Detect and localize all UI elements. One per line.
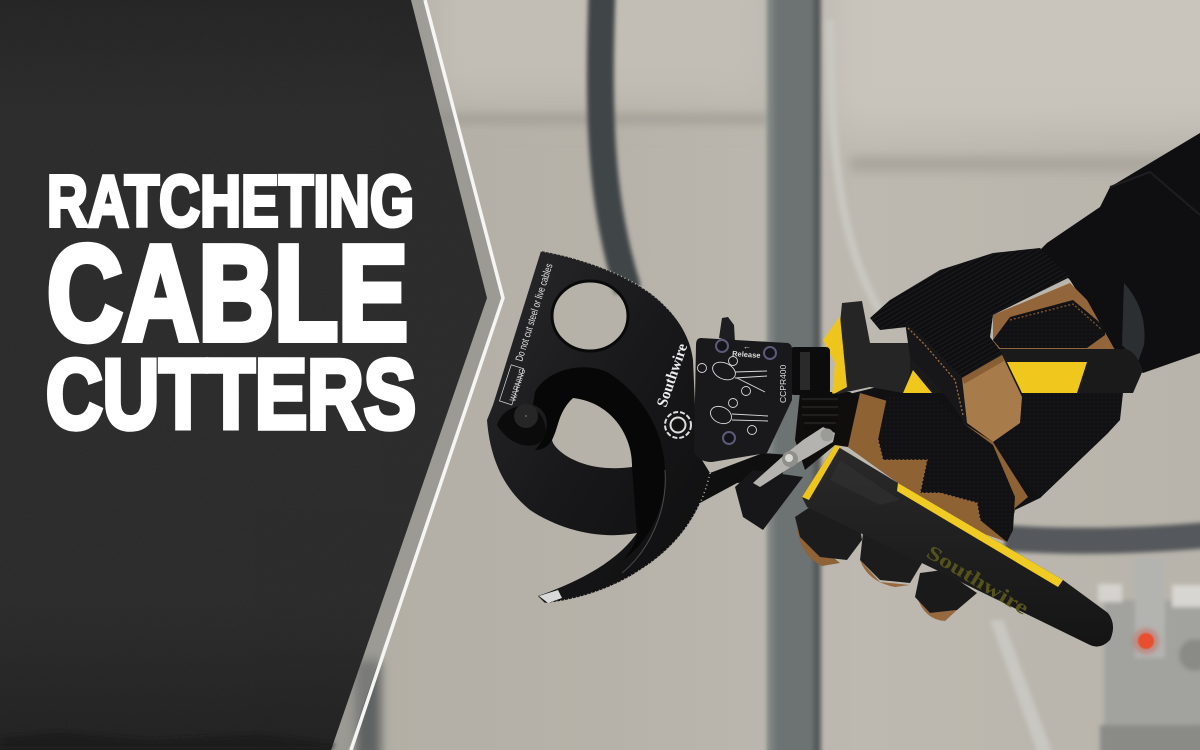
blade tip highlight xyxy=(539,590,562,603)
brown palm xyxy=(848,393,1028,542)
shadow behind spring xyxy=(795,392,862,470)
plate label text: CCPR400 xyxy=(778,364,788,403)
warning label xyxy=(499,365,527,405)
bolt lobe xyxy=(497,406,546,446)
plate label text: ← xyxy=(743,342,751,351)
palm heel xyxy=(993,393,1123,498)
photo: ratcheting cable cutter tool xyxy=(487,133,1200,647)
dark glove behind latch xyxy=(735,470,803,530)
handle logo text: Southwire xyxy=(922,541,1032,620)
gloved hand and sleeve xyxy=(795,133,1200,621)
cuff shadow xyxy=(1122,283,1145,362)
vertical steel pole xyxy=(767,0,821,750)
red indicator light xyxy=(1133,628,1159,654)
plate diagrams xyxy=(698,356,768,434)
glove back and thumb xyxy=(870,248,1070,442)
white chevron outline xyxy=(351,0,503,750)
plate label text: Release xyxy=(732,349,761,360)
release lever tab xyxy=(719,317,735,342)
upper handle xyxy=(823,301,1143,395)
warning label: WARNING xyxy=(507,367,527,403)
dark palm insert xyxy=(878,397,1015,542)
hand silhouette backing xyxy=(845,380,1123,542)
plate label text xyxy=(732,342,788,403)
dark conduit cable xyxy=(600,0,628,290)
title xyxy=(46,161,416,449)
yellow handle band xyxy=(802,445,840,500)
wrist brown panel xyxy=(993,283,1115,350)
cutter blade xyxy=(487,251,710,603)
Southwire logo text: Southwire xyxy=(654,341,691,409)
blade hole rim xyxy=(552,281,628,351)
yellow handle grip xyxy=(1007,362,1087,393)
curved blade slot xyxy=(533,367,665,560)
handle head block xyxy=(833,301,910,395)
Southwire emblem xyxy=(665,412,691,438)
thin white cable xyxy=(830,20,885,320)
spring and pivot xyxy=(700,347,840,530)
blade teeth xyxy=(541,251,710,603)
plate bolts xyxy=(716,340,776,444)
tool side plate xyxy=(694,338,792,462)
brown thumb tip xyxy=(962,355,1022,442)
black sleeve xyxy=(1040,133,1200,373)
translucent chevron band xyxy=(325,0,503,750)
title line: RATCHETING: RATCHETING xyxy=(47,161,414,242)
pivot bolt xyxy=(514,404,538,428)
warning text: Do not cut steel or live cables xyxy=(513,262,556,363)
yellow head band xyxy=(823,316,847,395)
title line: CABLE: CABLE xyxy=(47,218,408,368)
handle bar xyxy=(903,349,1143,393)
lower fingers xyxy=(795,507,977,621)
lower handle xyxy=(802,445,1113,647)
dark chevron panel xyxy=(0,0,487,750)
metal release latch xyxy=(753,427,835,487)
yellow handle stripe xyxy=(897,483,1063,587)
equipment lower right xyxy=(990,558,1200,750)
horizontal dark cable xyxy=(1005,535,1200,541)
title line: CUTTERS: CUTTERS xyxy=(46,339,416,449)
